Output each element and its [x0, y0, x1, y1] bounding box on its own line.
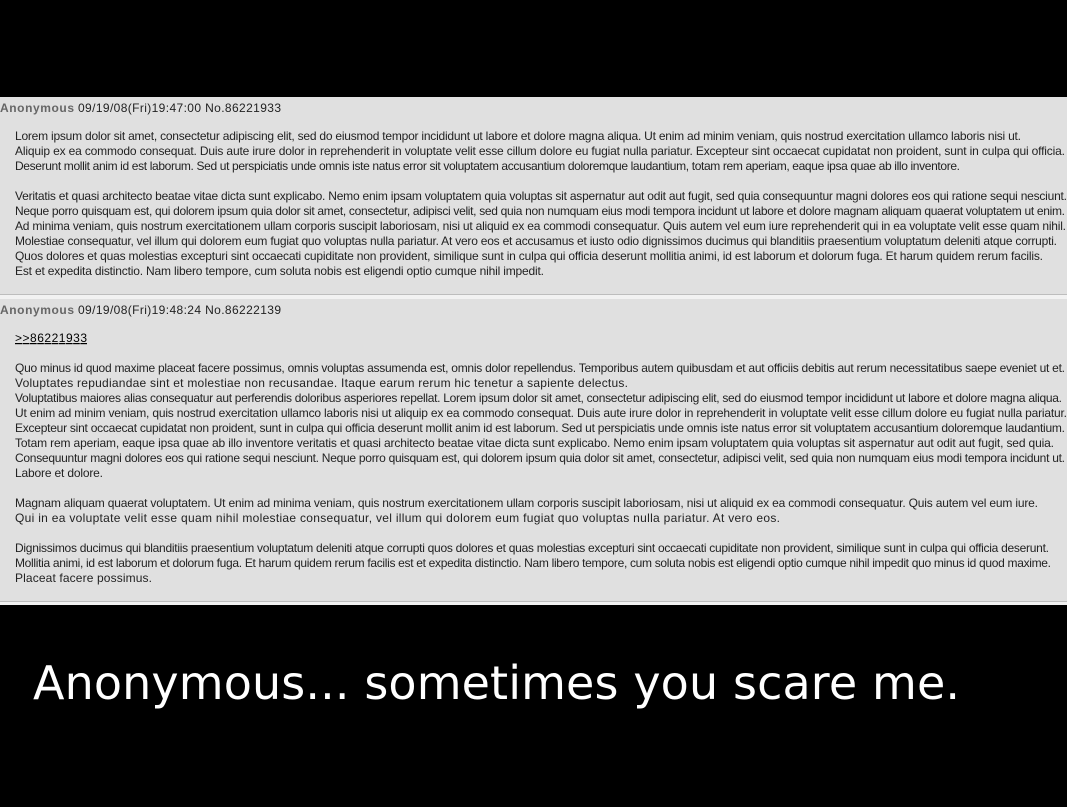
text block: second post, paragraph three (placeholder): Dignissimos ducimus qui blanditiis praesentium voluptatum deleniti atque corrupti quos dolores et quas molestias excepturi sint occaecati cupiditate non provident, similique sunt in culpa qui officia deserunt. — [15, 541, 1049, 555]
text block: first post, paragraph two (placeholder): Ad minima veniam, quis nostrum exercitationem ullam corporis suscipit laboriosam, nisi ut aliquid ex ea commodi consequatur. Quis autem vel eum iure reprehenderit qui in ea voluptate velit esse quam nihil. — [15, 219, 1066, 233]
text block: first post, paragraph two (placeholder): Quos dolores et quas molestias excepturi sint occaecati cupiditate non provident, similique sunt in culpa qui officia deserunt mollitia animi, id est laborum et dolorum fuga. Et harum quidem rerum facilis. — [15, 249, 1043, 263]
post header: first post: 09/19/08(Fri)19:47:00 No.86221933 — [78, 101, 281, 115]
caption: Anonymous... sometimes you scare me. — [33, 656, 960, 710]
panel: second forum post — [0, 299, 1067, 602]
text block: second post, paragraph three (placeholder) — [15, 541, 1051, 585]
text block: second post, paragraph three (placeholder): Placeat facere possimus. — [15, 571, 152, 585]
text block: first post, paragraph two (placeholder) — [15, 189, 1067, 278]
text block: first post, paragraph two (placeholder): Molestiae consequatur, vel illum qui dolorem eum fugiat quo voluptas nulla pariatur. At vero eos et accusamus et iusto odio dignissimos ducimus qui blanditiis praesentium voluptatum deleniti atque corrupti. — [15, 234, 1057, 248]
text block: second post, paragraph one (placeholder): Totam rem aperiam, eaque ipsa quae ab illo inventore veritatis et quasi architecto beatae vitae dicta sunt explicabo. Nemo enim ipsam voluptatem quia voluptas sit aspernatur aut odit aut fugit, sed quia. — [15, 436, 1054, 450]
panel: first forum post — [0, 97, 1067, 295]
text block: second post, paragraph one (placeholder): Ut enim ad minim veniam, quis nostrud exercitation ullamco laboris nisi ut aliquip ex ea commodo consequat. Duis aute irure dolor in reprehenderit in voluptate velit esse cillum dolore eu fugiat nulla pariatur. — [15, 406, 1067, 420]
text block: second post, paragraph two (placeholder) — [15, 496, 1038, 525]
text block: second post, paragraph three (placeholder): Mollitia animi, id est laborum et dolorum fuga. Et harum quidem rerum facilis est et expedita distinctio. Nam libero tempore, cum soluta nobis est eligendi optio cumque nihil impedit quo minus id quod maxime. — [15, 556, 1051, 570]
text block: first post, paragraph one (placeholder) — [15, 129, 1065, 173]
text block: second post, paragraph one (placeholder): Excepteur sint occaecat cupidatat non proident, sunt in culpa qui officia deserunt mollit anim id est laborum. Sed ut perspiciatis unde omnis iste natus error sit voluptatem accusantium doloremque laudantium. — [15, 421, 1065, 435]
text block: second post, paragraph two (placeholder): Magnam aliquam quaerat voluptatem. Ut enim ad minima veniam, quis nostrum exercitationem ullam corporis suscipit laboriosam, nisi ut aliquid ex ea commodi consequatur. Quis autem vel eum iure. — [15, 496, 1038, 510]
text block: first post, paragraph two (placeholder): Neque porro quisquam est, qui dolorem ipsum quia dolor sit amet, consectetur, adipisci velit, sed quia non numquam eius modi tempora incidunt ut labore et dolore magnam aliquam quaerat voluptatem ut enim. — [15, 204, 1065, 218]
text block: second post, paragraph two (placeholder): Qui in ea voluptate velit esse quam nihil molestiae consequatur, vel illum qui dolorem eum fugiat quo voluptas nulla pariatur. At vero eos. — [15, 511, 780, 525]
reply link: >>86221933 — [15, 331, 87, 345]
text block: second post, paragraph one (placeholder): Consequuntur magni dolores eos qui ratione sequi nesciunt. Neque porro quisquam est, qui dolorem ipsum quia dolor sit amet, consectetur, adipisci velit, sed quia non numquam eius modi tempora incidunt ut. — [15, 451, 1065, 465]
text block: first post, paragraph two (placeholder): Veritatis et quasi architecto beatae vitae dicta sunt explicabo. Nemo enim ipsam voluptatem quia voluptas sit aspernatur aut odit aut fugit, sed quia consequuntur magni dolores eos qui ratione sequi nesciunt. — [15, 189, 1067, 203]
text block: second post, paragraph one (placeholder): Quo minus id quod maxime placeat facere possimus, omnis voluptas assumenda est, omnis dolor repellendus. Temporibus autem quibusdam et aut officiis debitis aut rerum necessitatibus saepe eveniet ut et. — [15, 361, 1065, 375]
post header: second post: 09/19/08(Fri)19:48:24 No.86222139 — [78, 303, 281, 317]
post header: first post: Anonymous — [0, 101, 74, 115]
text block: first post, paragraph one (placeholder): Aliquip ex ea commodo consequat. Duis aute irure dolor in reprehenderit in voluptate velit esse cillum dolore eu fugiat nulla pariatur. Excepteur sint occaecat cupidatat non proident, sunt in culpa qui officia. — [15, 144, 1065, 158]
post header: second post: Anonymous — [0, 303, 74, 317]
text block: first post, paragraph two (placeholder): Est et expedita distinctio. Nam libero tempore, cum soluta nobis est eligendi optio cumque nihil impedit. — [15, 264, 544, 278]
text block: second post, paragraph one (placeholder): Labore et dolore. — [15, 466, 103, 480]
text block: second post, paragraph one (placeholder) — [15, 361, 1067, 480]
text block: second post, paragraph one (placeholder): Voluptatibus maiores alias consequatur aut perferendis doloribus asperiores repellat. Lorem ipsum dolor sit amet, consectetur adipiscing elit, sed do eiusmod tempor incididunt ut labore et dolore magna aliqua. — [15, 391, 1062, 405]
text block: first post, paragraph one (placeholder): Deserunt mollit anim id est laborum. Sed ut perspiciatis unde omnis iste natus error sit voluptatem accusantium doloremque laudantium, totam rem aperiam, eaque ipsa quae ab illo inventore. — [15, 159, 960, 173]
text block: second post, paragraph one (placeholder): Voluptates repudiandae sint et molestiae non recusandae. Itaque earum rerum hic tenetur a sapiente delectus. — [15, 376, 628, 390]
text block: first post, paragraph one (placeholder): Lorem ipsum dolor sit amet, consectetur adipiscing elit, sed do eiusmod tempor incididunt ut labore et dolore magna aliqua. Ut enim ad minim veniam, quis nostrud exercitation ullamco laboris nisi ut. — [15, 129, 1021, 143]
